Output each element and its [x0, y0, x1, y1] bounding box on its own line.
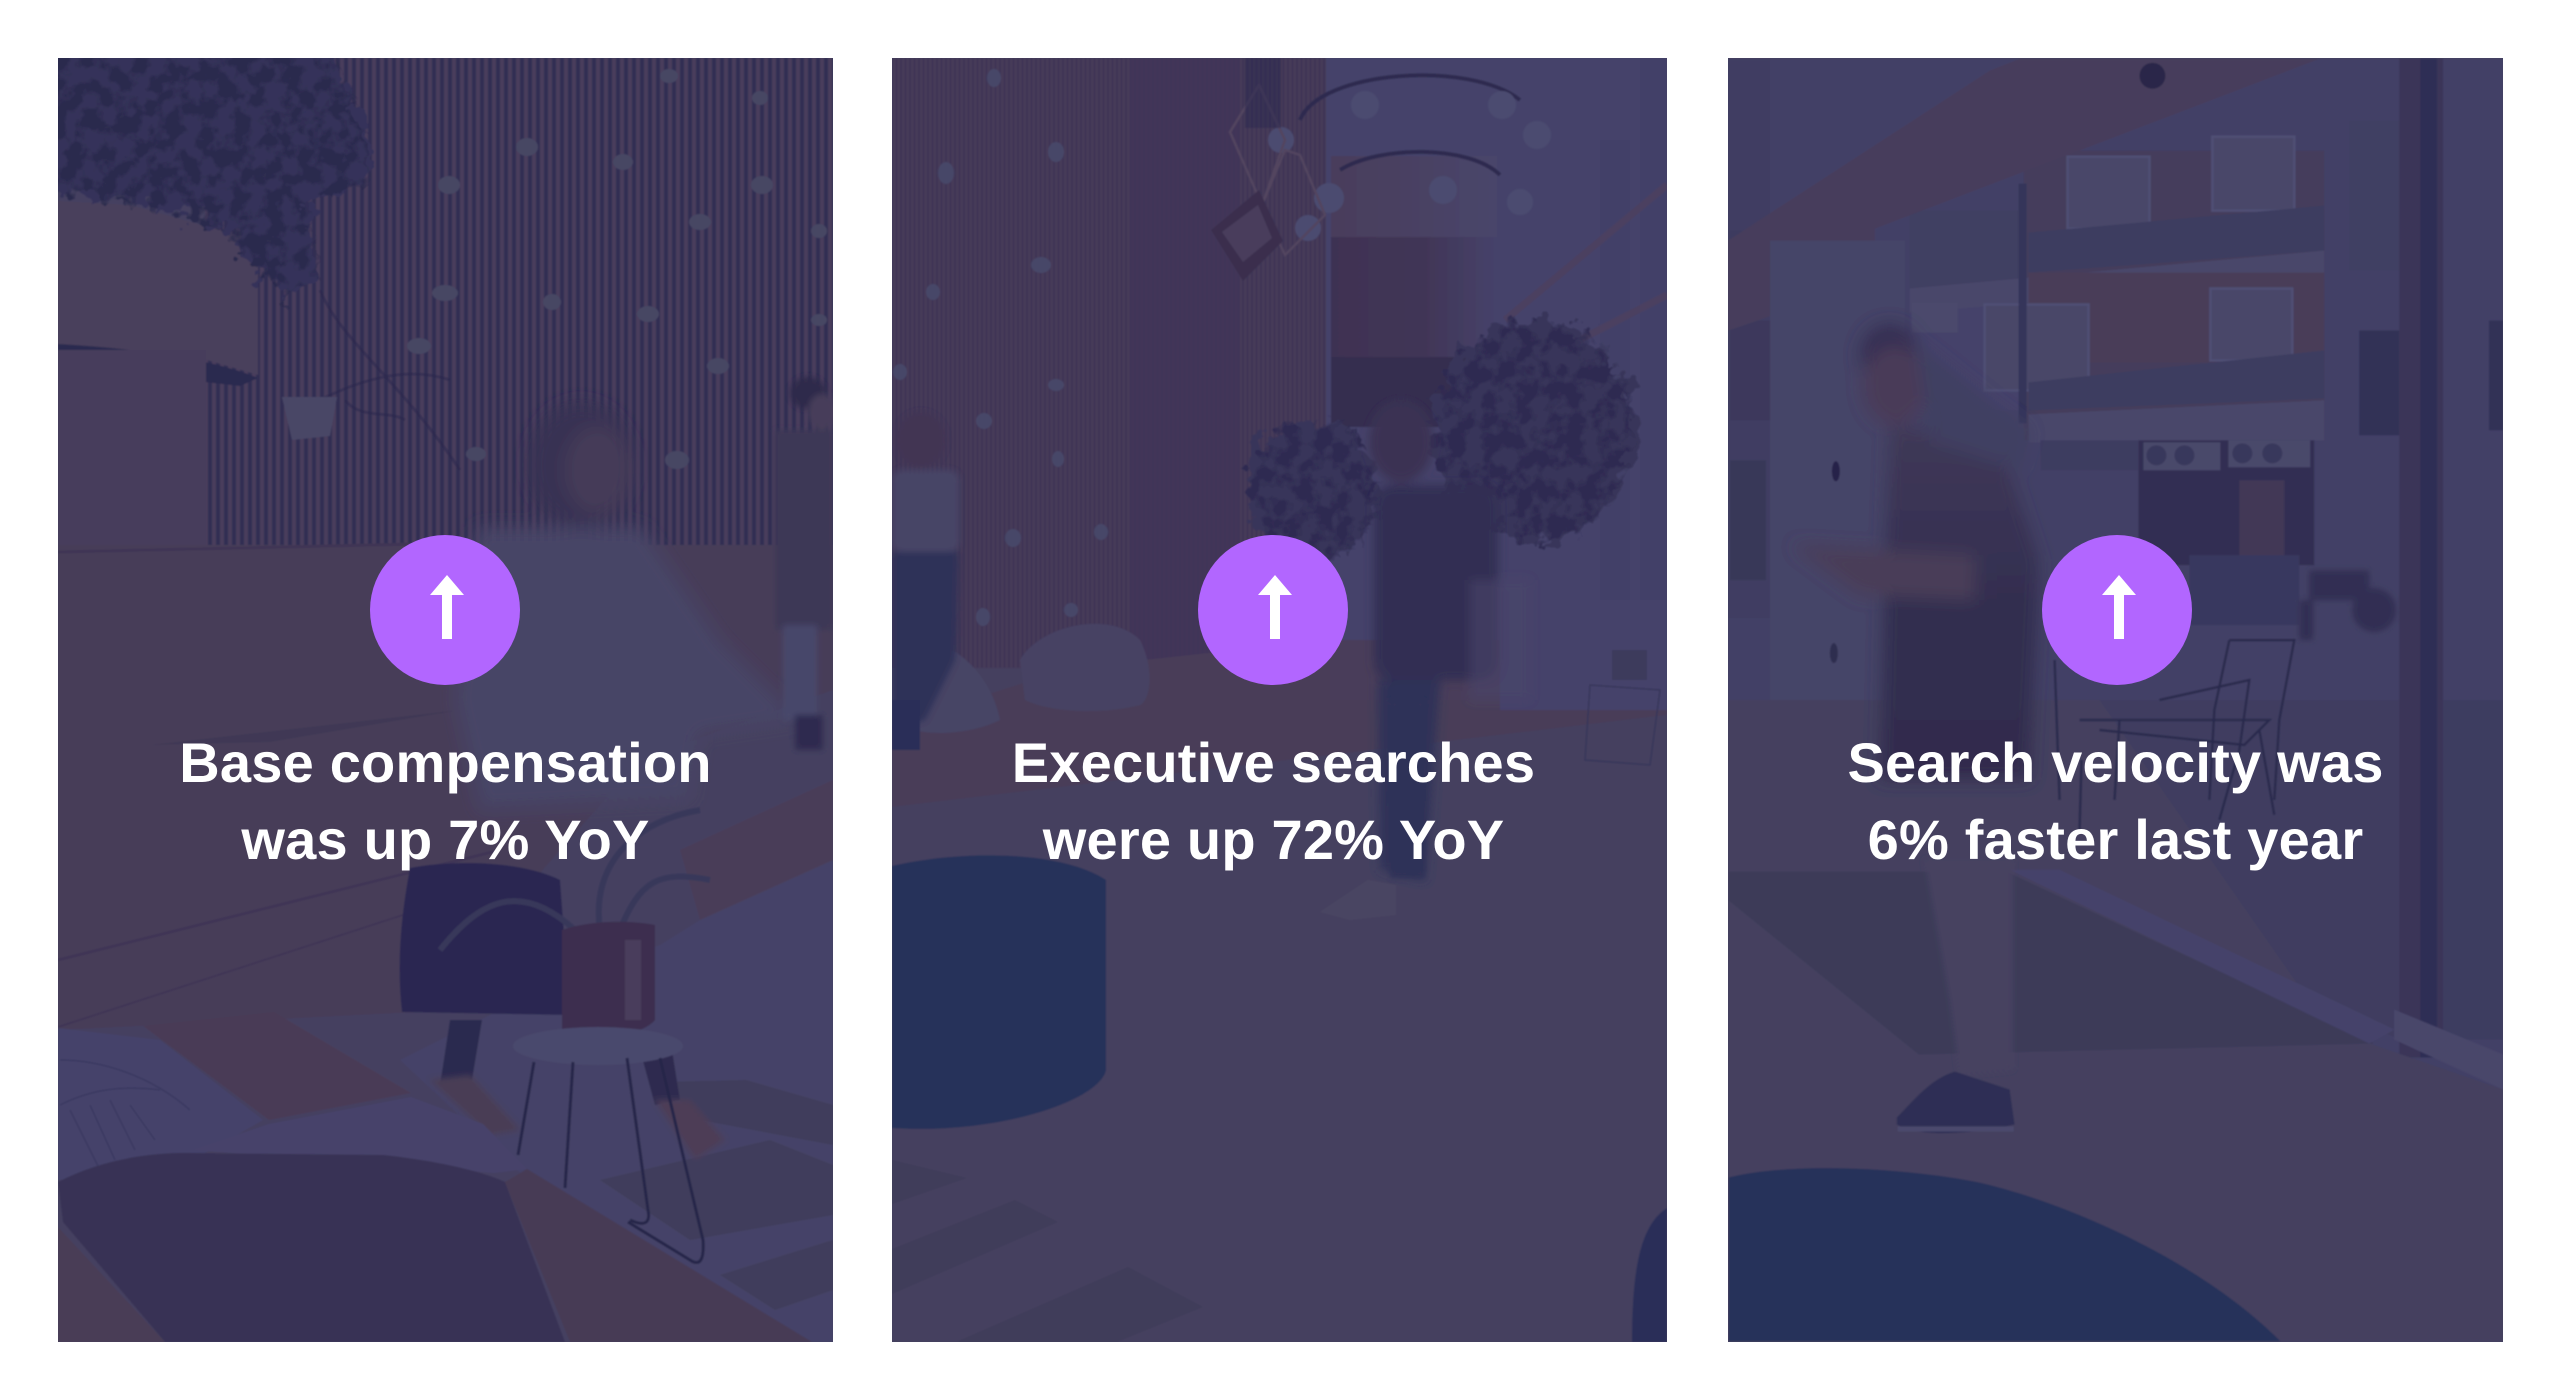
wood foreground [505, 1169, 812, 1342]
lamps [1268, 91, 1551, 241]
caption [1847, 731, 2384, 871]
light rings [1300, 75, 1520, 175]
building behind [1326, 58, 1667, 678]
left window strip [1728, 59, 1770, 618]
photo: lobby with pouf and plants [892, 58, 1667, 1342]
slatted wall [205, 58, 833, 548]
shoe [1320, 880, 1396, 920]
tower [1331, 156, 1497, 237]
badge: up arrow [2042, 535, 2192, 685]
badge: up arrow [370, 535, 520, 685]
wood floor band [143, 1012, 411, 1120]
panel: search velocity [1728, 58, 2503, 1342]
door details [1832, 461, 1840, 481]
badge: up arrow [1198, 535, 1348, 685]
motorcycle [2299, 570, 2396, 640]
upper planter [58, 201, 258, 375]
caption: was up 7% YoY [241, 808, 650, 871]
photo: office lobby with climbing wall [58, 58, 833, 1342]
plant [440, 810, 710, 950]
rug [892, 1160, 1203, 1342]
photo: glass entrance with building behind [1728, 58, 2503, 1342]
pants [1925, 860, 2013, 1075]
caption: were up 72% YoY [1043, 808, 1504, 871]
panel: executive searches [892, 58, 1667, 1342]
glass right [2443, 700, 2503, 1040]
counter [58, 545, 833, 1030]
bean bags [1020, 624, 1149, 711]
shoe [1897, 1072, 2015, 1133]
plants [1250, 320, 1635, 560]
blue pouf [1729, 1168, 2280, 1341]
floor [892, 715, 1667, 1342]
caption: Executive searches [1012, 731, 1535, 794]
beam [1728, 59, 2319, 330]
mat [1729, 872, 2374, 1055]
slatted wall [892, 58, 1332, 668]
shop [2138, 440, 2314, 565]
glass frame mullion [2019, 184, 2027, 423]
man, blurred [1369, 402, 1530, 880]
chairs [2055, 640, 2294, 830]
lower planter [58, 350, 206, 550]
floor [400, 860, 833, 1342]
balcony 1 [2029, 206, 2324, 273]
wall holds [407, 69, 827, 631]
right pouf [1632, 1208, 1667, 1342]
wall row 2 [2029, 273, 2324, 362]
woman, blurred [455, 403, 800, 810]
dark side wall [2041, 440, 2138, 470]
panel: base compensation [58, 58, 833, 1342]
floor [1728, 700, 2503, 1341]
caption: 6% faster last year [1868, 808, 2363, 871]
stool [513, 1027, 683, 1065]
cushions [58, 1028, 263, 1180]
geometric shelf [1230, 85, 1325, 255]
caption [1012, 731, 1535, 871]
woman [892, 412, 959, 730]
man in background [775, 377, 836, 750]
caption: Base compensation [179, 731, 712, 794]
wood floor [892, 640, 1667, 807]
left reflection [1910, 211, 2024, 291]
AC unit [1912, 303, 1958, 332]
holds [893, 69, 1108, 626]
blue pouf [892, 855, 1106, 1129]
bag and legs [400, 863, 570, 1015]
railings [1505, 185, 1667, 350]
plant pot [562, 922, 655, 1036]
upper wall of building [2024, 151, 2324, 440]
rug [600, 1080, 833, 1310]
window frame column [2399, 59, 2443, 1058]
balcony 2 [2029, 350, 2324, 410]
hanging pot [282, 397, 337, 440]
side stool [1585, 685, 1660, 765]
man, blurred [1793, 323, 2040, 780]
caption [179, 731, 712, 871]
foliage [40, 40, 372, 300]
door threshold [2394, 1010, 2503, 1089]
window row 1 [2068, 157, 2149, 229]
caption: Search velocity was [1847, 731, 2384, 794]
